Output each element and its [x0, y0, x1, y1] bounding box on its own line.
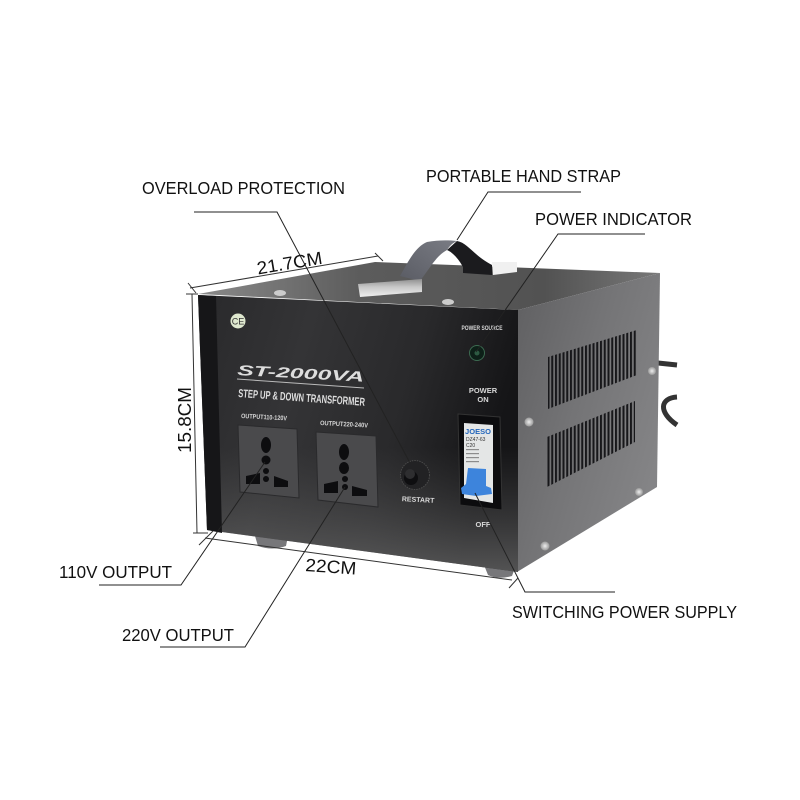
- power LED: [470, 346, 484, 360]
- circuit breaker: C20: [466, 443, 475, 449]
- callout: overload protection: OVERLOAD PROTECTION: [142, 178, 345, 198]
- vent slots upper: [548, 330, 637, 409]
- circuit breaker: DZ47-63: [466, 437, 486, 443]
- callout: 110V output: [59, 462, 265, 585]
- circuit breaker: [458, 414, 502, 510]
- dimension: height 15.8CM: 15.8CM: [175, 387, 195, 453]
- dimension: height 15.8CM: [175, 294, 208, 533]
- top face: [198, 262, 660, 310]
- callout: portable hand strap: PORTABLE HAND STRAP: [426, 166, 621, 186]
- subtitle: STEP UP & DOWN TRANSFORMER: [238, 388, 366, 409]
- rubber feet: [255, 536, 516, 578]
- dimension: width 22CM: 22CM: [305, 555, 357, 579]
- callout: 220V output: [122, 487, 345, 647]
- top screws: [274, 290, 454, 305]
- model underline: [237, 379, 364, 388]
- callout: 220V output: 220V OUTPUT: [122, 625, 234, 645]
- socket 110V: [238, 425, 299, 498]
- dimension: width 22CM: [199, 531, 518, 588]
- callout: portable hand strap: [426, 166, 621, 240]
- callout: overload protection: [142, 178, 410, 463]
- power on label: POWER: [469, 386, 498, 395]
- restart knob: [400, 460, 430, 490]
- dimension: depth 21.7CM: 21.7CM: [255, 248, 324, 278]
- strap dark underside: [447, 241, 492, 275]
- transformer product photo: [198, 240, 677, 578]
- socket label 220V: OUTPUT220-240V: [320, 420, 369, 430]
- callout: switching power supply: [475, 493, 737, 622]
- callout: power indicator: POWER INDICATOR: [535, 209, 692, 229]
- vent slots lower: [547, 401, 635, 487]
- power source label: POWER SOURCE: [462, 325, 503, 332]
- CE mark: CE: [232, 316, 244, 326]
- silver bracket: [358, 279, 422, 297]
- side face with vents: [517, 273, 660, 572]
- callout: switching power supply: SWITCHING POWER SUPPLY: [512, 602, 737, 622]
- carrying handle: [358, 240, 517, 297]
- circuit breaker: JOESO: [465, 429, 492, 436]
- strap grey band: [400, 240, 457, 281]
- off label: OFF: [476, 520, 491, 529]
- front panel: [198, 295, 518, 572]
- CE mark: [230, 314, 246, 328]
- model name: ST-2000VA: [237, 363, 364, 386]
- callout: power indicator: [476, 209, 692, 352]
- socket 220V: [316, 432, 378, 507]
- power on label: [469, 386, 498, 404]
- socket label 110V: OUTPUT110-120V: [241, 413, 288, 422]
- restart label: RESTART: [402, 496, 435, 505]
- power on label: ON: [477, 395, 489, 404]
- callout: 110V output: 110V OUTPUT: [59, 562, 172, 582]
- power cables: [658, 363, 677, 425]
- blue switch: [461, 468, 492, 496]
- dimension: depth 21.7CM: [188, 248, 383, 293]
